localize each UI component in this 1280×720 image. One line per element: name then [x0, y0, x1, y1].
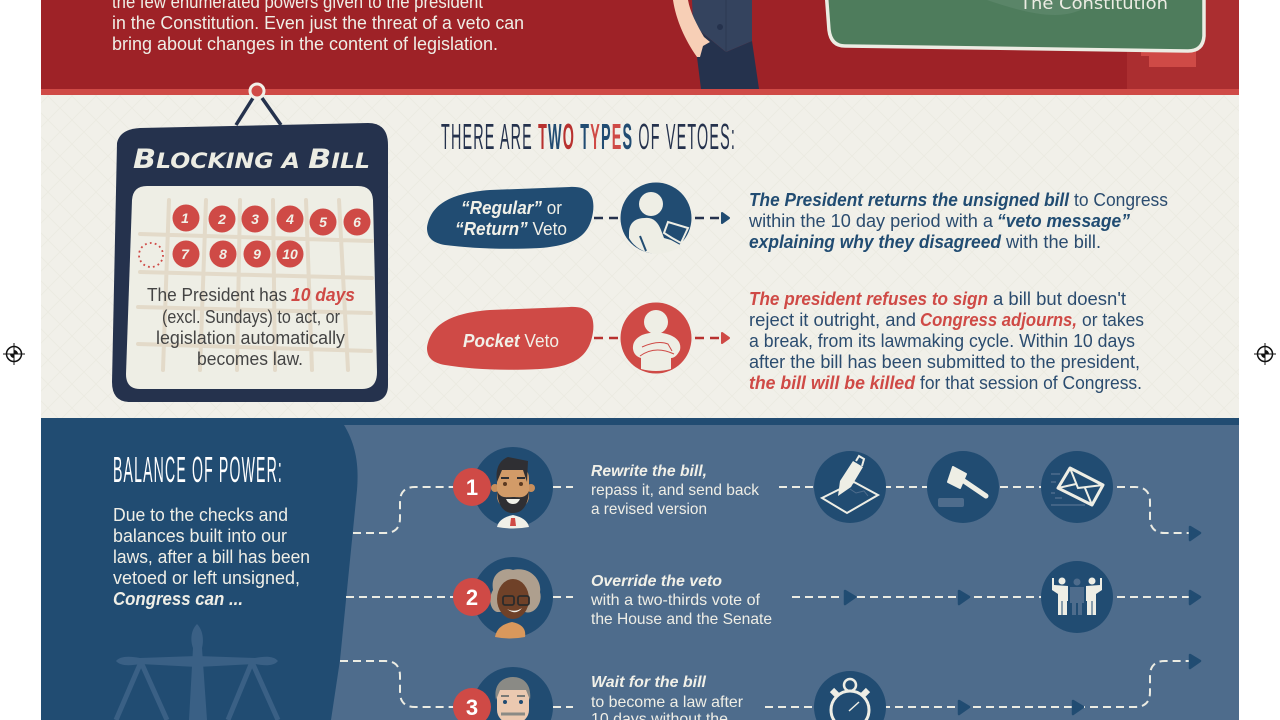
avatar 2: woman with glasses: [473, 557, 553, 638]
arrows: row 2: [845, 591, 1200, 604]
avatar 3: older man: [473, 667, 553, 720]
badge 1: [453, 468, 491, 506]
badge 2: [453, 578, 491, 616]
description: regular veto: [748, 190, 1168, 252]
description: pocket veto: the bill will be killed: [749, 373, 916, 393]
calendar day markers: 7: [181, 246, 190, 262]
step 1 text: Rewrite the bill,: [591, 463, 707, 480]
calendar day markers: 4: [285, 211, 294, 227]
calendar day markers: 6: [353, 214, 361, 230]
panel: veto power intro: [41, 0, 1239, 95]
step 1 text: a revised version: [591, 501, 707, 518]
badge 3: [453, 688, 491, 720]
calendar day markers: 10: [282, 246, 298, 262]
icon: scales of justice: [116, 624, 278, 720]
step 1 text: repass it, and send back: [591, 482, 760, 499]
balance of power text: vetoed or left unsigned,: [113, 568, 300, 588]
registration mark left: [3, 343, 25, 365]
calendar: blocking a bill: [112, 84, 388, 402]
illustration: chalkboard: [826, 0, 1204, 51]
arrow: pocket veto: [594, 333, 729, 343]
connector lines: [340, 487, 1192, 707]
label: pocket veto: [427, 307, 593, 370]
description: pocket veto: or takes: [1082, 310, 1144, 330]
calendar text: 10 days: [291, 285, 355, 305]
label: regular or return veto: [427, 187, 593, 249]
calendar day markers: 2: [217, 211, 226, 227]
description: regular veto: within the 10 day period with a: [748, 211, 994, 231]
step 2 text: Override the veto: [591, 573, 722, 590]
description: pocket veto: a break, from its lawmaking cycle. Within 10 days: [749, 331, 1135, 351]
description: pocket veto: The president refuses to sign: [749, 289, 988, 309]
calendar text: legislation automatically: [156, 328, 345, 348]
calendar day markers: 3: [251, 211, 259, 227]
icon: two-thirds vote figures: [1041, 561, 1113, 633]
calendar text: The President has: [147, 285, 287, 305]
calendar day markers: 8: [219, 246, 227, 262]
arrows: row 3: [959, 655, 1200, 714]
icon: person reading veto message: [620, 182, 692, 254]
calendar text: (excl. Sundays) to act, or: [162, 307, 340, 327]
heading: two types of vetoes: THERE ARE TWO TYPES OF VETOES:: [441, 116, 736, 157]
step 3 text: to become a law after: [591, 694, 744, 711]
calendar text: becomes law.: [197, 349, 303, 369]
balance of power text: [113, 505, 310, 609]
illustration: president figure: [673, 0, 759, 89]
intro text: [112, 0, 524, 54]
badge 3: 3: [466, 695, 478, 720]
description: regular veto: to Congress: [1074, 190, 1168, 210]
intro text: in the Constitution. Even just the threat of a veto can: [112, 13, 524, 33]
description: regular veto: The President returns the unsigned bill: [749, 190, 1070, 210]
step 3 text: Wait for the bill: [591, 674, 707, 691]
calendar day markers: 1: [181, 210, 189, 226]
step 2 text: the House and the Senate: [591, 611, 772, 628]
avatar 1: bearded man: [473, 447, 553, 528]
step 2 text: [590, 573, 772, 628]
step 1 text: [591, 463, 760, 518]
calendar day markers: 5: [319, 214, 327, 230]
icon: envelope: [1041, 451, 1113, 523]
description: pocket veto: [749, 289, 1144, 393]
panel: balance of power: BALANCE OF POWER:: [113, 449, 283, 490]
icon: person with crossed arms: [620, 302, 692, 374]
label: pocket veto: Pocket Veto: [463, 331, 559, 351]
panel: two types of vetoes: [41, 84, 1239, 418]
badge 2: 2: [466, 585, 478, 610]
icon: pen signing: [814, 451, 886, 523]
description: pocket veto: for that session of Congress.: [920, 373, 1142, 393]
balance of power text: balances built into our: [113, 526, 287, 546]
description: pocket veto: Congress adjourns,: [920, 310, 1077, 330]
balance of power text: Due to the checks and: [113, 505, 288, 525]
badge 1: 1: [466, 475, 478, 500]
calendar day markers: 9: [253, 246, 261, 262]
calendar text: [147, 285, 355, 369]
description: pocket veto: after the bill has been submitted to the president,: [749, 352, 1140, 372]
description: pocket veto: reject it outright, and: [749, 310, 916, 330]
description: regular veto: “veto message”: [997, 211, 1130, 231]
balance of power text: Congress can ...: [113, 589, 243, 609]
description: pocket veto: a bill but doesn't: [993, 289, 1126, 309]
description: regular veto: with the bill.: [1005, 232, 1101, 252]
calendar heading: BLOCKING A BILL: [133, 144, 370, 175]
icon: stopwatch: [814, 671, 886, 720]
arrow: regular veto: [594, 213, 729, 223]
arrow: row 1 end: [1190, 527, 1200, 540]
panel: balance of power: [41, 418, 1239, 720]
label: regular or return veto: “Return” Veto: [455, 219, 567, 239]
calendar day markers: [139, 204, 370, 268]
description: regular veto: explaining why they disagreed: [749, 232, 1002, 252]
label: regular or return veto: “Regular” or: [461, 198, 562, 218]
step 2 text: with a two-thirds vote of: [590, 592, 761, 609]
balance of power text: laws, after a bill has been: [113, 547, 310, 567]
step 3 text: [591, 674, 744, 720]
registration mark right: [1254, 343, 1276, 365]
intro text: bring about changes in the content of legislation.: [112, 34, 498, 54]
icon: gavel: [927, 451, 999, 523]
